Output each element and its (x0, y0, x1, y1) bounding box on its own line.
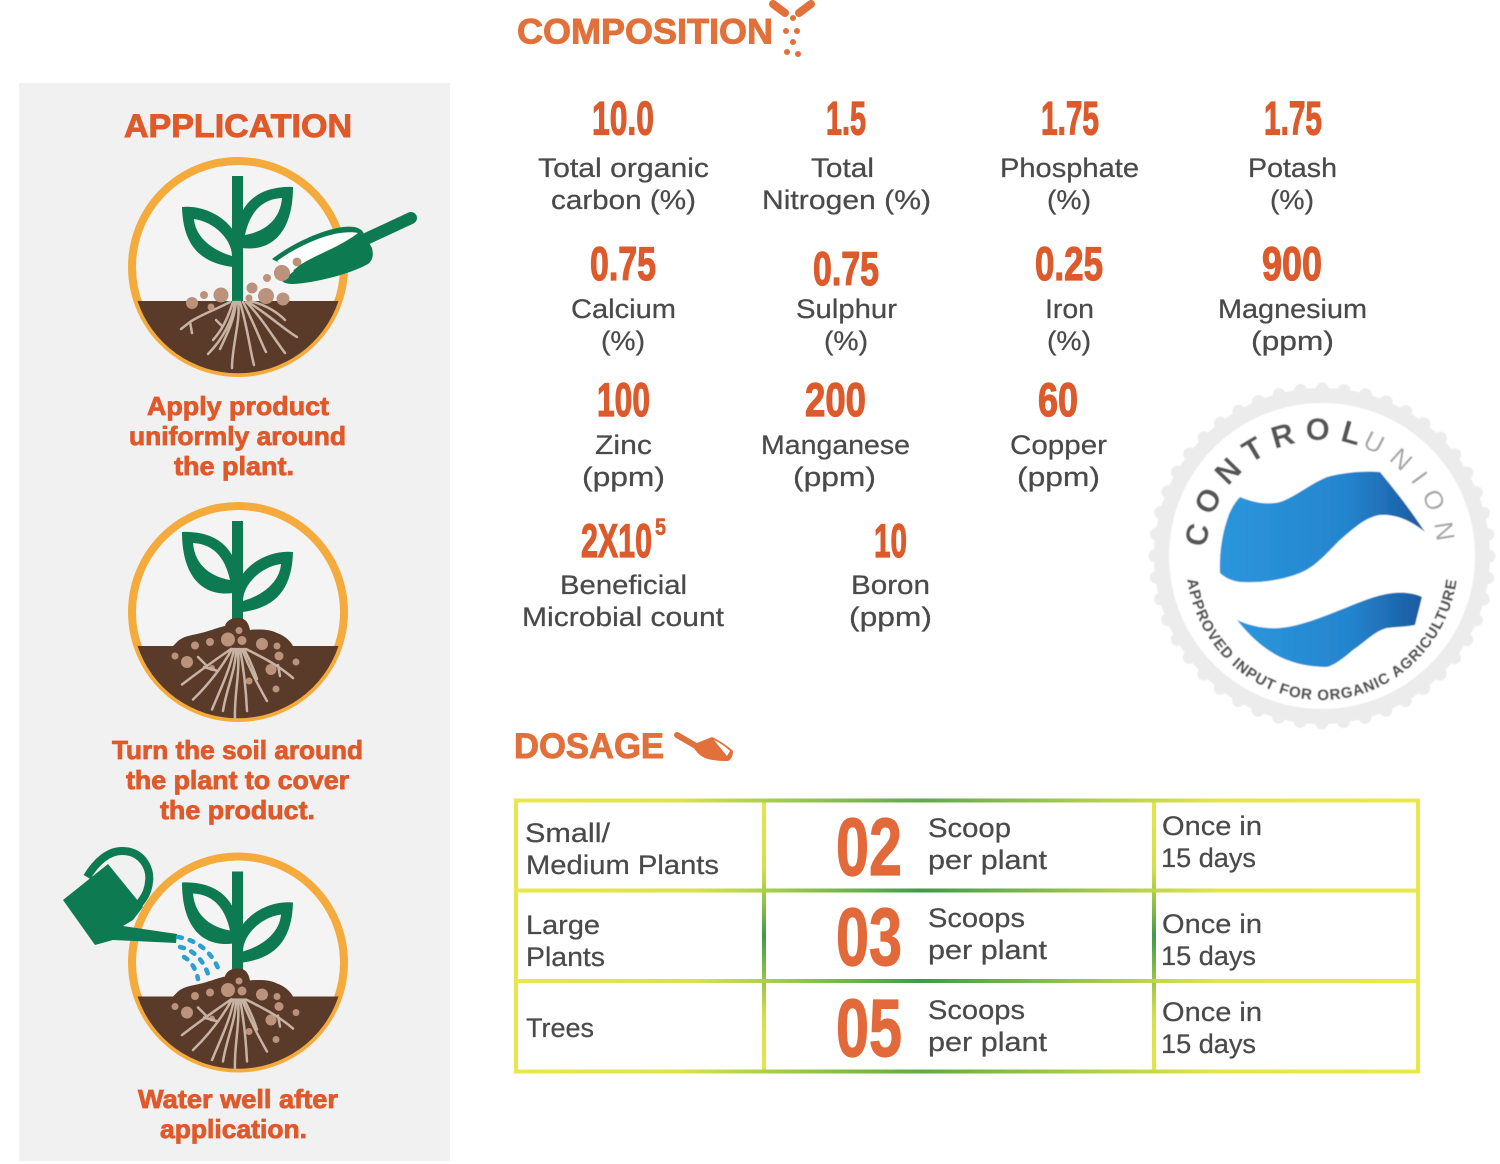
composition: beneficial microbial count: 2X10 (581, 514, 652, 567)
application step 1 text (129, 391, 346, 481)
composition: beneficial microbial count: 5 (655, 514, 666, 541)
dosage heading: DOSAGE (514, 727, 664, 766)
row: trees: Scoops (928, 995, 1025, 1025)
composition: iron (1035, 237, 1103, 356)
composition: calcium: (%) (601, 326, 645, 356)
row: large plants: Large (526, 910, 600, 940)
row: small and medium plants (525, 802, 1262, 893)
control union certification badge: APPROVED INPUT FOR ORGANIC AGRICULTURE (1186, 578, 1458, 701)
row: trees: 05 (836, 983, 902, 1074)
composition: calcium (571, 237, 676, 356)
composition: magnesium (1218, 237, 1367, 356)
application step 2 text: the product. (160, 795, 315, 825)
composition: magnesium: Magnesium (1218, 294, 1367, 324)
row: trees: Once in (1162, 997, 1262, 1027)
icon: soil turned around plant (132, 506, 344, 719)
composition: sulphur: 0.75 (813, 242, 879, 295)
row: large plants: 03 (836, 892, 902, 983)
composition: total nitrogen (762, 92, 931, 215)
row: large plants: Once in (1162, 909, 1262, 939)
composition: manganese (761, 373, 910, 492)
composition: boron: Boron (851, 570, 930, 600)
control union certification badge (1148, 382, 1496, 730)
composition: phosphate: 1.75 (1041, 92, 1099, 144)
composition: beneficial microbial count: Beneficial (560, 570, 687, 600)
row: small and medium plants: Once in (1162, 811, 1262, 841)
composition: total nitrogen: Nitrogen (%) (762, 185, 931, 215)
composition: total organic carbon: 10.0 (592, 92, 654, 144)
composition: potash: 1.75 (1264, 92, 1322, 144)
composition: total organic carbon (538, 92, 709, 215)
icon: dosage scoop (677, 735, 733, 761)
composition: total nitrogen: 1.5 (826, 92, 866, 144)
composition: iron: (%) (1047, 326, 1091, 356)
composition: zinc (582, 373, 665, 492)
row: large plants (526, 892, 1262, 983)
application step 3 text (138, 1084, 338, 1144)
composition: zinc: (ppm) (582, 462, 665, 492)
application step 3 text: application. (160, 1114, 307, 1144)
application step 1 text: uniformly around (129, 421, 346, 451)
composition: copper: Copper (1010, 430, 1107, 460)
composition: calcium: 0.75 (590, 237, 656, 290)
composition: sulphur: (%) (824, 326, 868, 356)
application step 2 text (112, 735, 363, 825)
composition: beneficial microbial count (522, 514, 725, 632)
composition: phosphate: (%) (1047, 185, 1091, 215)
row: trees: per plant (928, 1027, 1048, 1057)
icon: watering the plant (63, 851, 344, 1070)
row: trees: Trees (526, 1013, 594, 1043)
composition: calcium: Calcium (571, 294, 676, 324)
composition: beneficial microbial count: Microbial count (522, 602, 725, 632)
application step 3 text: Water well after (138, 1084, 338, 1114)
composition: phosphate (1000, 92, 1139, 215)
composition: total organic carbon: carbon (%) (551, 185, 696, 215)
icon: apply product to plant (132, 161, 411, 373)
dosage table (514, 799, 1420, 1074)
composition heading: COMPOSITION (517, 12, 773, 52)
row: large plants: Plants (526, 942, 605, 972)
row: small and medium plants: Small/ (525, 818, 611, 848)
table grid (514, 799, 1420, 1073)
row: small and medium plants: Medium Plants (526, 850, 719, 880)
composition: zinc: 100 (597, 373, 650, 426)
row: small and medium plants: Scoop (928, 813, 1011, 843)
composition: copper (1010, 373, 1107, 492)
composition: boron (849, 514, 932, 632)
composition: potash: (%) (1270, 185, 1314, 215)
row: small and medium plants: per plant (928, 845, 1048, 875)
row: large plants: 15 days (1161, 941, 1256, 971)
application panel (19, 83, 450, 1161)
composition: phosphate: Phosphate (1000, 153, 1139, 183)
application step 1 text: Apply product (147, 391, 329, 421)
composition: boron: 10 (874, 514, 907, 567)
icon: capsule with granules (773, 4, 811, 57)
composition: magnesium: 900 (1262, 237, 1322, 290)
application step 2 text: the plant to cover (126, 765, 349, 795)
composition: manganese: 200 (805, 373, 866, 426)
row: small and medium plants: 02 (836, 802, 902, 893)
composition: copper: 60 (1038, 373, 1078, 426)
composition: potash (1248, 92, 1337, 215)
composition: sulphur: Sulphur (796, 294, 897, 324)
composition: manganese: Manganese (761, 430, 910, 460)
composition: total nitrogen: Total (811, 153, 874, 183)
composition: sulphur (796, 242, 897, 356)
composition: magnesium: (ppm) (1251, 326, 1334, 356)
application step 1 text: the plant. (174, 451, 294, 481)
row: trees (526, 983, 1262, 1074)
application heading: APPLICATION (124, 108, 352, 144)
composition: zinc: Zinc (595, 430, 652, 460)
composition: potash: Potash (1248, 153, 1337, 183)
composition: manganese: (ppm) (793, 462, 876, 492)
composition: iron: 0.25 (1035, 237, 1103, 290)
composition: total organic carbon: Total organic (538, 153, 709, 183)
row: trees: 15 days (1161, 1029, 1256, 1059)
control union certification badge: UNION (1365, 430, 1455, 540)
application step 2 text: Turn the soil around (112, 735, 363, 765)
composition: boron: (ppm) (849, 602, 932, 632)
row: small and medium plants: 15 days (1161, 843, 1256, 873)
row: large plants: per plant (928, 935, 1048, 965)
composition: copper: (ppm) (1017, 462, 1100, 492)
row: large plants: Scoops (928, 903, 1025, 933)
composition: iron: Iron (1045, 294, 1094, 324)
control union certification badge: CONTROL (1186, 418, 1358, 546)
